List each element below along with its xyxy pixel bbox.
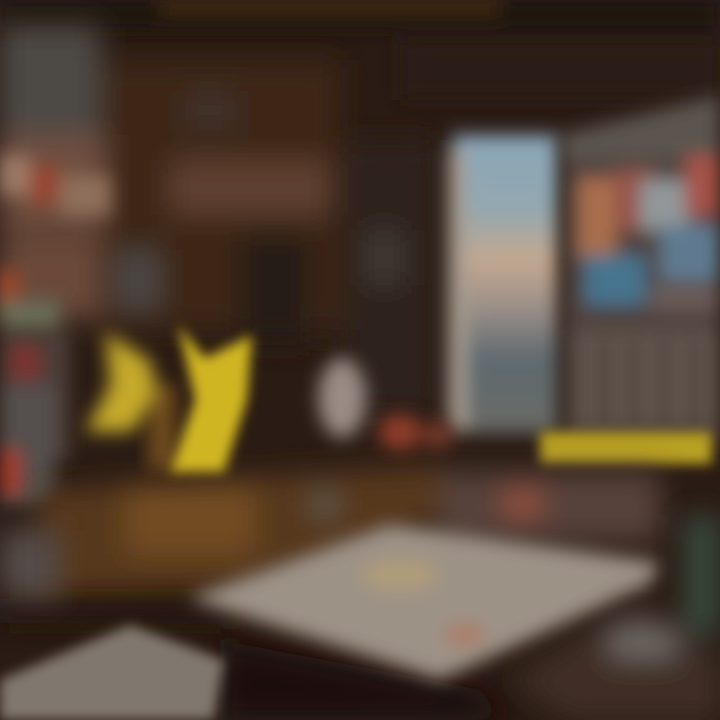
- ceiling: [0, 0, 720, 100]
- pikachu figure right: [170, 325, 252, 472]
- pikachu figure left: [85, 332, 158, 432]
- bottom right floor and green object: [510, 515, 720, 720]
- grey object left: [0, 530, 60, 598]
- white figure and red objects: [318, 358, 452, 450]
- desk wood surface: [30, 465, 660, 605]
- window: [448, 135, 558, 433]
- shelves: [0, 25, 435, 410]
- poster: [560, 95, 720, 440]
- lower dark desk body: [0, 598, 510, 720]
- yellow poster bar: [540, 432, 712, 464]
- orange glow between figures: [148, 385, 176, 470]
- paper bottom left: [0, 625, 224, 720]
- shelf items left: [0, 155, 110, 505]
- white table top: [188, 524, 660, 680]
- poster lower stripes: [600, 340, 698, 425]
